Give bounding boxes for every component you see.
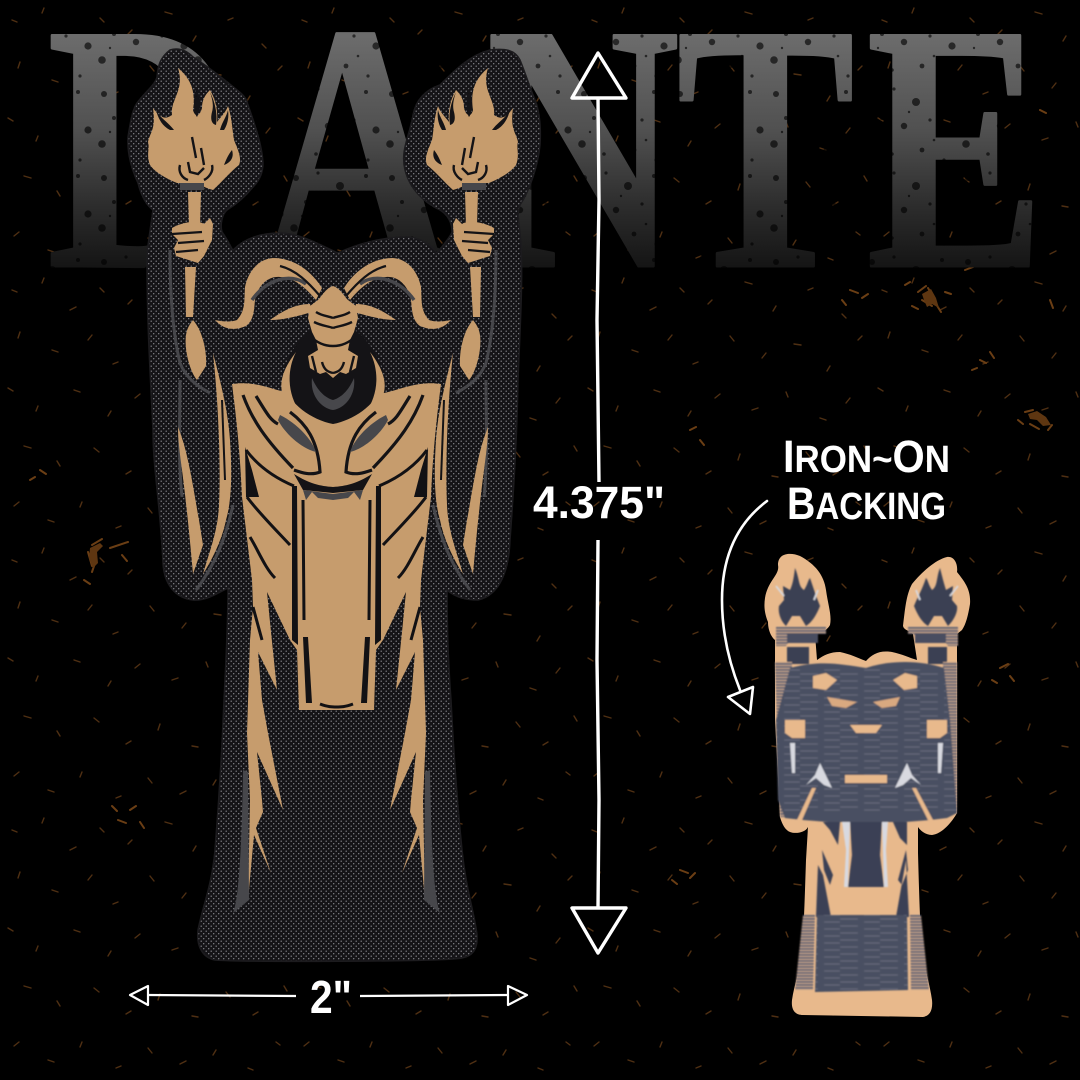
backing silhouette (764, 554, 970, 1017)
curved arrow to backing (722, 501, 767, 714)
patch backing outline (128, 49, 540, 961)
panel bottom edge (320, 704, 337, 707)
right eye patch (893, 673, 917, 690)
main dark body (776, 662, 957, 822)
ear (270, 304, 312, 320)
side hatching (775, 662, 957, 817)
label line 1: IRON~ON (783, 431, 950, 482)
central bar (845, 775, 887, 783)
sleeve vertical lines (222, 400, 225, 480)
flame dark tongues (156, 88, 233, 165)
height label: 4.375" (533, 477, 665, 528)
lower block streaks (815, 915, 908, 992)
upper line (597, 98, 599, 482)
face (308, 286, 333, 378)
backing woven inner detail (775, 568, 958, 992)
outer sleeve streak (178, 427, 203, 574)
right flame dark (914, 568, 957, 626)
torch collar (180, 183, 204, 190)
left flame halo (776, 586, 818, 600)
lower side hatch left (795, 915, 815, 990)
robe body and lower drape (232, 383, 336, 900)
background rust clusters (30, 110, 1053, 884)
lower A highlights (806, 763, 832, 788)
bottom arrowhead (572, 908, 626, 953)
flame (148, 68, 240, 190)
lower side hatch right (910, 915, 929, 990)
inner sleeve streak (203, 353, 231, 574)
mantle lower edge line (246, 450, 294, 486)
white sleeve ticks (790, 743, 943, 773)
shoulder peach spots (785, 720, 947, 738)
upper arm (186, 320, 206, 380)
hand (172, 218, 213, 263)
iron-on backing label (783, 431, 950, 529)
body streaks (776, 668, 957, 813)
horn (215, 258, 322, 329)
forearm strip (185, 267, 196, 317)
column white stripes (842, 822, 888, 887)
arrowhead (728, 687, 753, 714)
flame inner cluster (179, 137, 212, 180)
lower column dark (848, 822, 884, 887)
mantle side wedge (245, 447, 259, 497)
mantle grey shadow (278, 415, 316, 452)
torch bands (776, 627, 958, 646)
mantle dark scoop (294, 474, 333, 493)
lower drape grey (233, 770, 249, 913)
mantle grey band (303, 490, 333, 500)
sleeve grey outline (170, 250, 233, 590)
left line (148, 995, 296, 996)
lower line (597, 540, 599, 908)
torch handle (188, 192, 201, 226)
brow highlights (827, 697, 900, 708)
lower dark block (815, 915, 908, 992)
robe dark fold lines (247, 497, 304, 640)
right arrowhead (508, 986, 527, 1005)
face lines (310, 312, 333, 373)
mantle fold lines (243, 395, 320, 474)
top arrowhead (572, 53, 626, 98)
horn grey inner curve (252, 278, 306, 300)
width label: 2" (310, 971, 352, 1023)
robe outer vertical lines (292, 486, 312, 703)
left arrowhead (130, 986, 148, 1005)
left flame dark (779, 568, 820, 626)
width dimension arrow (130, 986, 527, 1005)
left eye patch (813, 673, 837, 690)
patch: front woven patch (128, 49, 540, 961)
right dark wedges (893, 822, 909, 917)
collar grey (312, 378, 333, 410)
label line 2: BACKING (787, 478, 946, 529)
left dark wedges (816, 822, 840, 917)
figure: lower robe, left half mirrored (232, 383, 337, 913)
figure: upper body, left half mirrored (148, 68, 333, 590)
right line (360, 995, 508, 996)
patch: iron-on backing (764, 554, 970, 1017)
collar crescent (281, 352, 300, 412)
right flame halo (916, 586, 958, 600)
horn lines (280, 266, 320, 296)
hands (787, 647, 947, 664)
collar dark circle (283, 318, 333, 424)
height dimension arrow (572, 53, 626, 953)
shoulder diagonal lines (797, 788, 933, 820)
